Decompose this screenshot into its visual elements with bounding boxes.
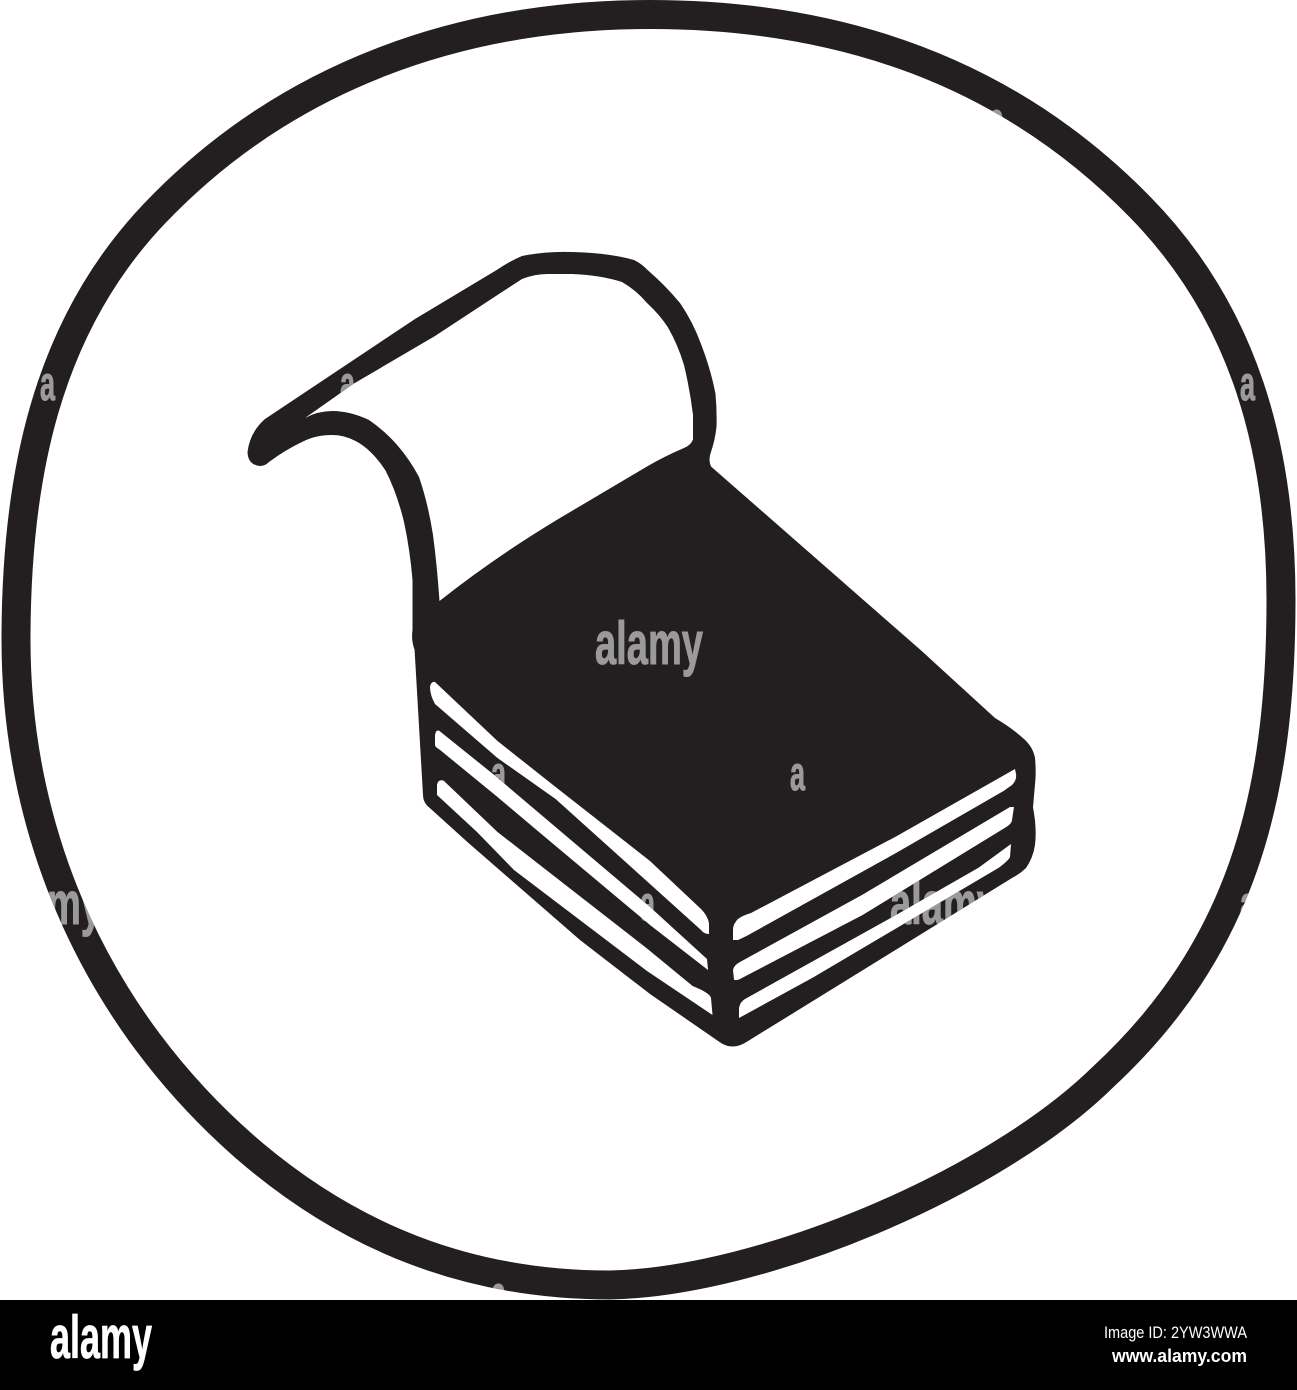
watermark: alamy text over the artwork: a xyxy=(1240,358,1255,411)
page edge stripes, left side xyxy=(430,682,712,1015)
page edge stripes, right side xyxy=(733,769,1016,1018)
footer bar xyxy=(0,1300,1297,1390)
watermark: alamy text over the artwork: a xyxy=(340,358,355,411)
footer image id: Image ID: 2YW3WWA xyxy=(1104,1323,1248,1342)
watermark: alamy text over the artwork: a xyxy=(40,358,55,411)
watermark: alamy text over the artwork: a xyxy=(1240,878,1255,931)
watermark: alamy text over the artwork: a xyxy=(640,878,655,931)
curled page interior xyxy=(305,274,693,601)
footer logo: alamy: alamy xyxy=(50,1304,152,1371)
watermark: alamy text over the artwork: alamy xyxy=(890,870,998,937)
icon: open book xyxy=(248,252,1036,1047)
watermark: alamy text over the artwork: a xyxy=(491,748,506,801)
watermark: alamy text over the artwork: a xyxy=(790,748,805,801)
book silhouette with curled page xyxy=(248,252,1036,1047)
watermark: alamy text over the artwork: a xyxy=(989,94,1004,147)
watermark: alamy text over the artwork: alamy xyxy=(595,610,703,677)
watermark: alamy text over the artwork: a xyxy=(491,1268,506,1321)
footer website: www.alamy.com xyxy=(1111,1346,1247,1366)
